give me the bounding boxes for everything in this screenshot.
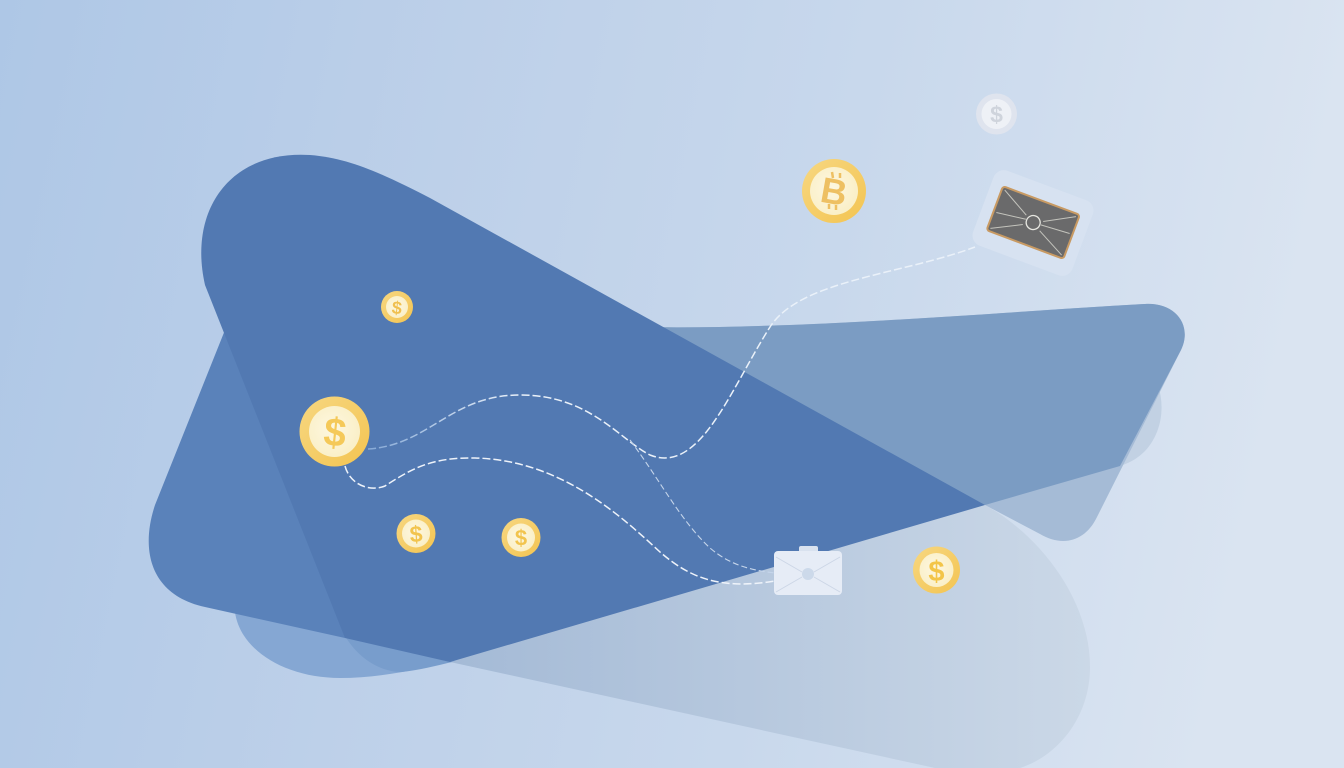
coin: small dollar lower middle: $: [515, 526, 527, 550]
dashed path: coin to upper wallet: [368, 247, 975, 458]
shape: main dark blue panel: [201, 155, 985, 662]
shape: left blue panel: [149, 330, 420, 638]
coin: small dollar lower left: $: [409, 521, 424, 547]
coin: small dollar upper: [381, 291, 413, 323]
coin: dollar right: $: [928, 556, 945, 588]
coin: small dollar lower left: [396, 514, 436, 553]
coin: faded dollar: [976, 94, 1017, 134]
icon: dark wallet envelope: [969, 167, 1097, 279]
icon: light envelope: [774, 546, 842, 595]
coin: bitcoin: [802, 159, 866, 223]
dashed path: branch to lower envelope: [630, 440, 775, 573]
coin: faded dollar: $: [990, 102, 1003, 128]
coin: large dollar: $: [322, 410, 348, 456]
coin: small dollar upper: $: [391, 298, 403, 318]
shape: pale lower band: [450, 505, 1090, 768]
dashed path: coin to lower envelope: [345, 458, 775, 584]
coin: dollar right: [913, 546, 960, 594]
shape: lower-left soft blob: [235, 612, 455, 678]
coin: large dollar: [300, 396, 370, 466]
shape: right translucent panel: [640, 304, 1185, 541]
coin: small dollar lower middle: [502, 518, 540, 557]
coin: bitcoin: B: [818, 169, 850, 214]
